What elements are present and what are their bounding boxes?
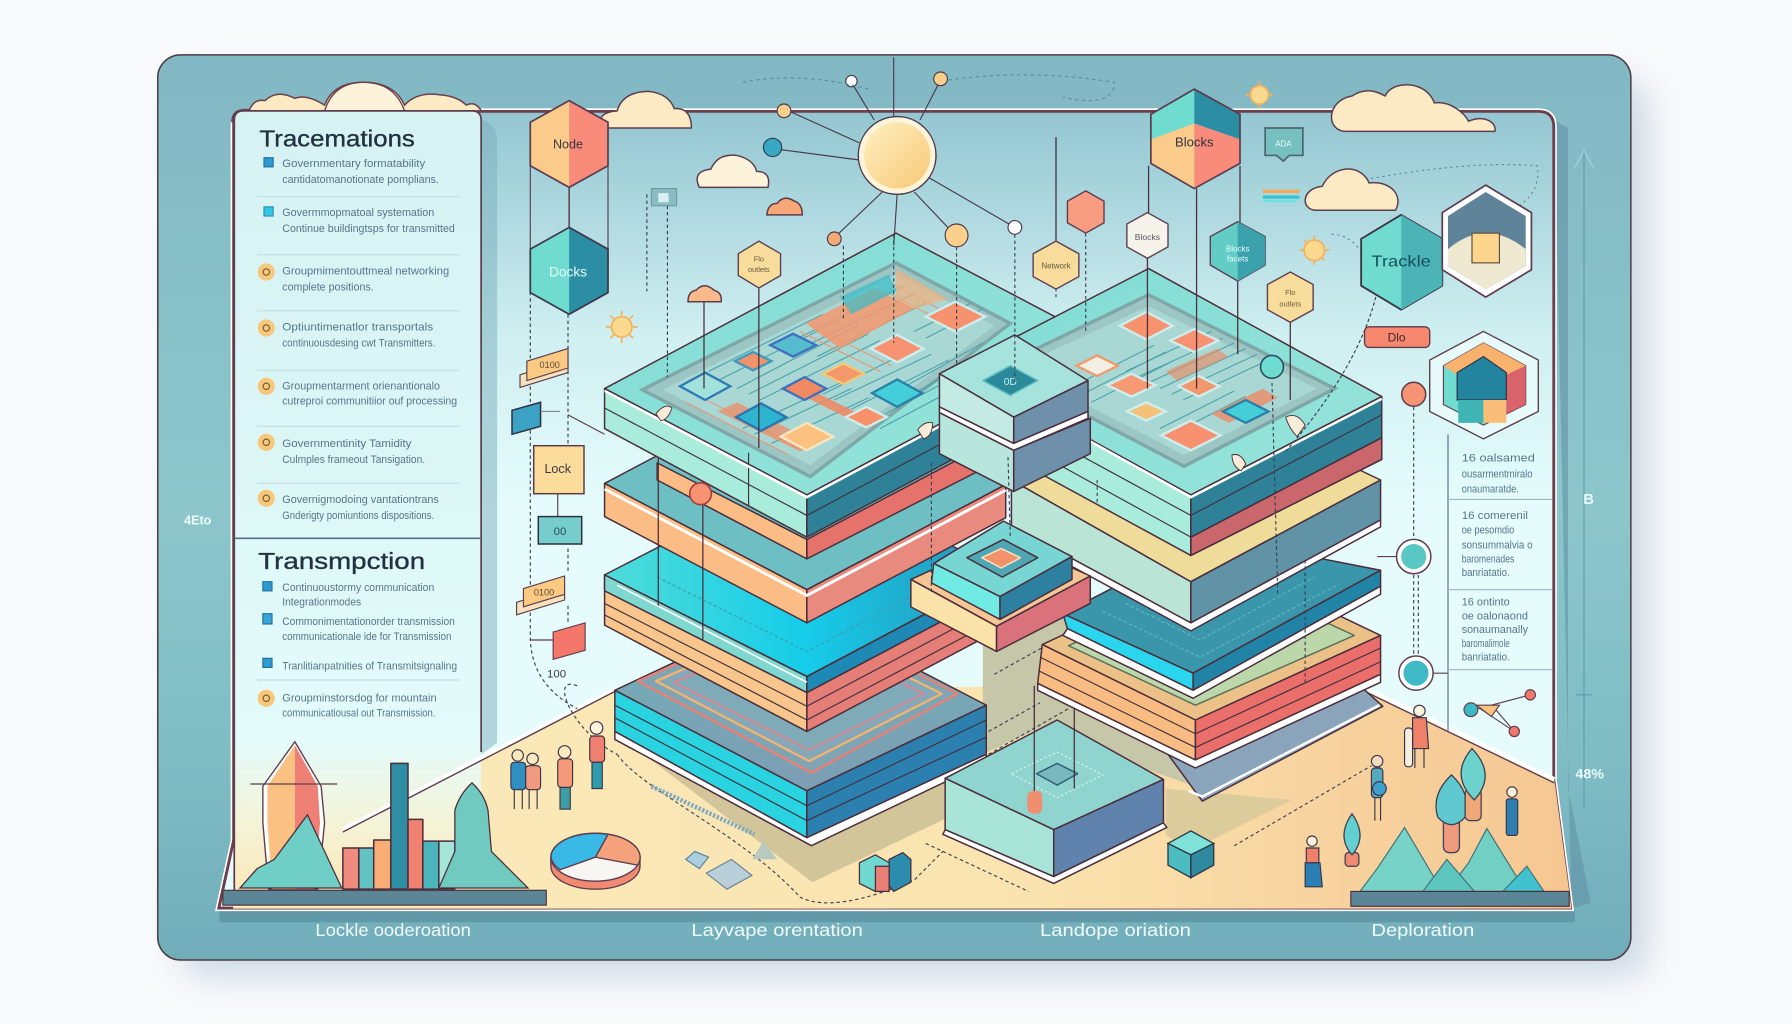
tag: teal 00: 00 — [554, 526, 566, 538]
person 2 — [526, 753, 541, 809]
pie chart — [551, 833, 640, 889]
list: section one rows: continuousdesing cwt Transmitters. — [282, 337, 435, 349]
hexagon: Node: Node — [553, 138, 583, 152]
hex: yellow left — [738, 241, 781, 288]
hex: teal: Blocks — [1226, 244, 1249, 253]
sun with rays — [763, 57, 1022, 247]
layer R5: bottom plate — [1168, 686, 1383, 801]
ground people right — [1305, 705, 1518, 887]
cloud: small orange — [767, 198, 802, 215]
tree: small — [1344, 814, 1360, 866]
right column notes: 16 comerenil — [1462, 510, 1528, 522]
base strip right — [1351, 891, 1569, 906]
sun: near docks — [606, 311, 638, 343]
spire: teal — [439, 783, 528, 888]
cloud: centre — [697, 155, 769, 187]
list: section one rows: Optiuntimenatlor transportals — [282, 321, 434, 333]
bottom frame shadow — [219, 910, 1575, 922]
hex: coral — [1067, 191, 1104, 233]
list: section one rows: Culmples frameout Tansigation. — [282, 454, 425, 466]
right frame shadow — [1554, 120, 1591, 909]
list: section one rows: Groupmentarment orienantionalo — [282, 381, 440, 393]
cloud: mid right — [1305, 169, 1398, 210]
layer L2: orange block — [605, 378, 1006, 623]
person: teal blue — [1371, 755, 1386, 821]
right column notes: baromalimole — [1462, 638, 1510, 650]
list: section one rows: Govermmopmatoal systemation — [282, 207, 434, 219]
right column notes: oe pesomdio — [1462, 525, 1514, 537]
tree: tall — [1461, 749, 1485, 821]
hex: yellow right: outlets — [1279, 299, 1301, 308]
hexagon: outlined block icon — [1430, 331, 1538, 439]
hexagon: Node — [530, 101, 608, 187]
cloud: top right — [1332, 85, 1495, 131]
layer R3: cyan block — [1063, 537, 1381, 698]
list: section one rows — [257, 158, 459, 522]
tree: middle — [1436, 775, 1467, 853]
side label: percent: 48% — [1575, 766, 1604, 782]
tag: Lock: Lock — [544, 462, 572, 476]
hex: yellow right: Flo — [1285, 288, 1295, 297]
mountains right — [1360, 827, 1544, 891]
person: lower coral — [1305, 836, 1322, 887]
person: tall coral — [1413, 705, 1429, 768]
list: section one rows: Continue buildingtsps for transmitted — [282, 223, 455, 235]
person: right blue — [1506, 787, 1518, 835]
list: section one rows: Gnderigty pomiuntions dispositions. — [282, 510, 434, 522]
list: section one rows: Governmentary formatability — [282, 158, 426, 170]
spire: coral — [250, 742, 337, 889]
mountain: left teal — [240, 815, 342, 888]
side label: B: B — [1583, 492, 1594, 508]
card shadow — [181, 80, 1649, 977]
cloud: small orange two — [688, 286, 721, 302]
hex: yellow centre — [1033, 241, 1079, 289]
hexagon: Blocks — [1151, 89, 1240, 189]
status tag: Dlo — [1388, 331, 1406, 345]
hexagon: Trackle: Trackle — [1371, 253, 1431, 270]
right column notes: banriatatio. — [1462, 652, 1510, 664]
bottom label 4: Deploration — [1371, 920, 1474, 940]
hex: yellow left: Flo — [754, 255, 764, 264]
cloud: top left — [600, 91, 691, 128]
ground — [233, 686, 1571, 909]
panel shadow strip — [481, 120, 497, 754]
tag: orange lower — [517, 576, 565, 615]
box B: small plate and block — [911, 521, 1090, 651]
rays — [773, 57, 1015, 246]
list: section one rows: complete positions. — [282, 281, 374, 293]
bottom label 1: Lockle ooderoation — [315, 920, 471, 940]
list: section one rows: Governigmodoing vantationtrans — [282, 494, 439, 506]
right column notes: oe oalonaond — [1462, 610, 1528, 622]
hex: teal — [1210, 222, 1265, 281]
small callout chip top: ADA — [1275, 139, 1292, 148]
right column notes — [1448, 434, 1552, 731]
person: white — [1405, 728, 1413, 767]
right column notes: sonaumanally — [1462, 624, 1529, 636]
hex: yellow right — [1267, 272, 1313, 322]
list: section two rows: Groupminstorsdog for mountain — [282, 693, 437, 705]
hex: white — [1127, 213, 1168, 258]
pins from nodes to layers — [647, 137, 1305, 686]
circuit traces — [686, 269, 992, 455]
right column notes: banriatatio. — [1462, 567, 1510, 579]
left side panel — [234, 111, 481, 899]
cube: teal small — [1168, 831, 1214, 878]
trees right — [1344, 749, 1485, 866]
label: 100: 100 — [547, 669, 566, 681]
list: section two rows: communicatiousal out Transmission. — [282, 708, 435, 720]
small hexagons — [738, 191, 1313, 322]
chip near sun left — [651, 189, 677, 206]
sun: mid right — [1299, 235, 1329, 265]
list: section one rows: cantidatomanotionate pomplians. — [282, 174, 439, 186]
small callout chip top — [1265, 128, 1303, 161]
layer L1b: thin orange layer — [657, 434, 1006, 559]
vertical axis arrow — [1574, 151, 1594, 809]
right column nodes — [1377, 382, 1448, 690]
scene backdrop — [218, 111, 1571, 909]
bottom label 3: Landope oriation — [1040, 920, 1191, 940]
status tag — [1365, 327, 1430, 347]
person 1 — [511, 750, 526, 809]
tag: orange upper: 0100 — [540, 360, 560, 370]
right column notes: baromenades — [1462, 553, 1515, 565]
list: section two rows: Continuoustormy communication — [282, 582, 434, 594]
layer clips right — [1232, 415, 1305, 471]
layer R2: yellow block — [1011, 389, 1381, 631]
small ground items — [686, 841, 777, 889]
cloud cluster above left panel — [249, 82, 481, 111]
hexagon: Docks: Docks — [549, 265, 587, 280]
bar chart — [343, 763, 455, 889]
list: section two rows: Commonimentationorder transmission — [282, 616, 455, 628]
list: section two rows: Tranlitianpatnities of Transmitsignaling — [282, 661, 457, 673]
list: section one rows: Governmentinity Tamidity — [282, 438, 412, 450]
right column notes: sonsummalvia o — [1462, 540, 1533, 552]
layer L3: cyan and orange block — [605, 474, 1006, 731]
tag: orange lower: 0100 — [534, 587, 554, 597]
box A: stacked block: 0D — [1004, 377, 1017, 388]
heading: section one: Tracemations — [259, 125, 415, 151]
dashed ground routes — [565, 646, 1371, 903]
list: section one rows: Groupmimentouttmeal networking — [282, 265, 449, 277]
left mountains and bar chart — [223, 742, 546, 905]
frame highlight — [216, 109, 1573, 910]
list: section two rows — [257, 582, 459, 720]
stack shadows on ground — [629, 606, 1291, 882]
hex: teal: facets — [1227, 255, 1248, 264]
tag: coral — [530, 623, 585, 659]
list: section two rows: Integrationmodes — [282, 597, 362, 609]
tag: teal 00 — [538, 517, 582, 544]
cubes on ground — [859, 853, 911, 891]
circuit tiles right — [1077, 312, 1269, 450]
tag: blue — [512, 402, 560, 434]
connector: Node to Docks — [568, 187, 570, 227]
side label: left: 4Eto — [184, 514, 212, 528]
person 4 — [590, 722, 605, 789]
layer clips — [656, 406, 933, 439]
hexagon: dark with yellow chip — [1442, 185, 1531, 297]
person 3 — [558, 746, 573, 809]
list: section one rows: cutreproi communitiior ouf processing — [282, 396, 457, 408]
circuit tiles — [680, 302, 985, 450]
bottom label 2: Layvape orentation — [691, 920, 863, 940]
right column notes: 16 oalsamed — [1462, 453, 1535, 465]
right column notes: ousarmentmiralo — [1462, 469, 1533, 481]
layer R4: orange block — [1038, 560, 1381, 768]
group of people left — [511, 722, 605, 809]
hexagon side rails — [530, 166, 608, 286]
heading: section two: Transmpction — [258, 548, 425, 574]
tag: orange upper — [520, 349, 568, 387]
base strip left — [223, 890, 546, 905]
box A: stacked block — [939, 335, 1090, 491]
list: section two rows: communicationale ide for Transmission — [282, 631, 451, 643]
main card — [158, 55, 1631, 960]
clouds in scene — [600, 85, 1495, 302]
layer R1: top right circuit block — [958, 269, 1382, 555]
circuit bed — [642, 263, 1010, 477]
colour bars — [1263, 190, 1299, 202]
sun: top right — [1246, 81, 1273, 109]
hexagon: Blocks: Blocks — [1175, 134, 1214, 149]
molecule icon — [1464, 690, 1535, 737]
tags on left rail — [512, 286, 605, 709]
right column notes: onaumaratde. — [1462, 484, 1519, 496]
box C: lower front block — [943, 686, 1167, 883]
layer L4: bottom block — [615, 606, 986, 846]
dotted top arcs — [743, 75, 1538, 451]
tag: Lock — [534, 446, 584, 494]
circuit bed right — [997, 295, 1335, 466]
circuit traces right — [1069, 331, 1278, 434]
hex: yellow left: outlets — [748, 265, 770, 274]
ground edge lines — [343, 686, 1554, 832]
small suns — [606, 81, 1329, 343]
hex: white: Blocks — [1135, 232, 1160, 242]
layer L1: top left circuit block — [605, 233, 1098, 537]
hex: yellow centre: Network — [1041, 262, 1072, 271]
right column notes: 16 ontinto — [1462, 597, 1510, 609]
hexagon: Docks — [530, 227, 608, 314]
hexagon: Trackle — [1361, 215, 1442, 310]
